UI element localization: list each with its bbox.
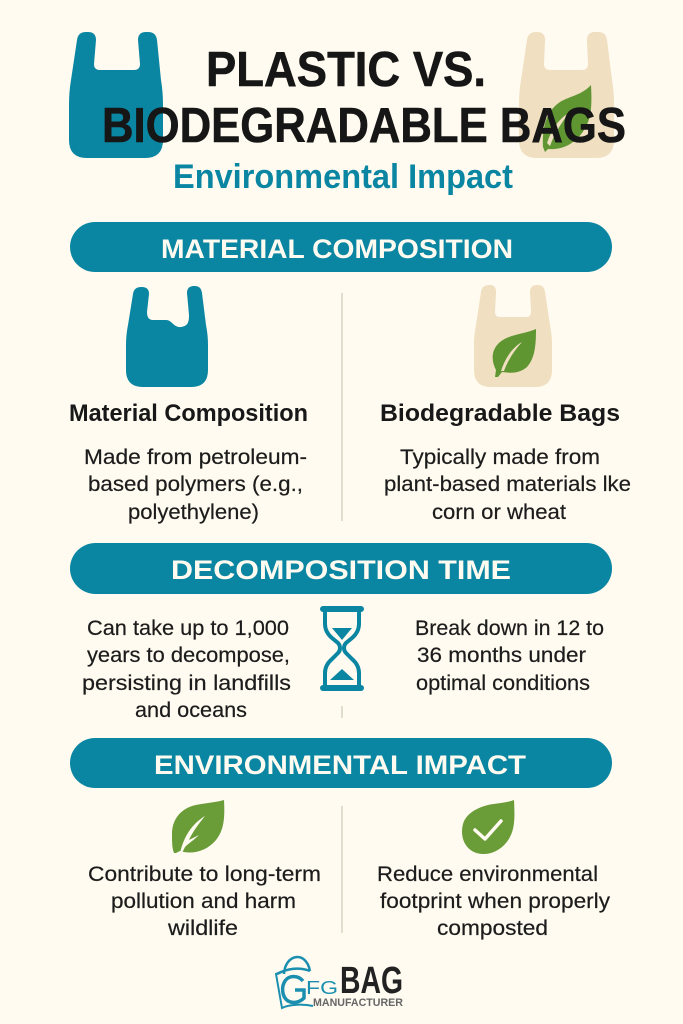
text: biodegradable material: corn or wheat <box>432 501 566 524</box>
icon: hourglass <box>320 606 364 691</box>
text: biodegradable impact: composted <box>437 917 548 940</box>
icon: check leaf <box>462 800 514 854</box>
title: BIODEGRADABLE BAGS <box>102 99 626 153</box>
text: biodegradable impact: footprint when properly <box>380 890 611 913</box>
banner: material composition: MATERIAL COMPOSITION <box>161 234 513 264</box>
subtitle: Environmental Impact <box>173 158 513 196</box>
text: plastic decomposition: persisting in landfills <box>82 672 291 695</box>
text: plastic impact: Contribute to long-term <box>88 863 321 886</box>
text: biodegradable material: plant-based materials lke <box>384 473 631 496</box>
icon: biodegradable bag with leaf <box>474 285 552 387</box>
text: biodegradable decomposition: 36 months under <box>417 644 586 667</box>
right heading: biodegradable bags: Biodegradable Bags <box>380 400 620 427</box>
text: plastic decomposition <box>82 617 291 722</box>
logo: MANUFACTURER <box>313 997 403 1009</box>
text: plastic decomposition: years to decompose, <box>87 644 290 667</box>
logo: FG <box>306 978 338 998</box>
icon: leaf <box>172 800 224 853</box>
text: plastic material: based polymers (e.g., <box>88 473 303 496</box>
text: plastic material: Made from petroleum- <box>84 446 307 469</box>
logo <box>276 957 403 1009</box>
text: plastic impact <box>88 863 321 940</box>
text: plastic material <box>84 446 307 524</box>
left heading: material composition: Material Composition <box>69 400 308 427</box>
text: biodegradable decomposition: Break down in 12 to <box>415 617 604 640</box>
logo: BAG <box>340 960 403 1002</box>
banner: material composition <box>70 222 612 272</box>
text: biodegradable material: Typically made from <box>400 446 600 469</box>
text: plastic impact: pollution and harm <box>111 890 296 913</box>
icon: plastic bag <box>126 286 208 387</box>
text: plastic decomposition: and oceans <box>135 699 247 722</box>
icon: header biodegradable bag with leaf <box>519 32 614 158</box>
icon: header plastic bag <box>69 32 163 158</box>
banner: decomposition time <box>70 543 612 594</box>
text: plastic impact: wildlife <box>167 917 238 940</box>
text: biodegradable decomposition: optimal conditions <box>416 672 590 695</box>
text: plastic material: polyethylene) <box>128 501 259 524</box>
text: biodegradable decomposition <box>415 617 604 695</box>
text: biodegradable material <box>384 446 631 524</box>
title <box>102 43 626 153</box>
banner: decomposition time: DECOMPOSITION TIME <box>171 555 511 585</box>
banner: environmental impact: ENVIRONMENTAL IMPACT <box>154 750 527 780</box>
title: PLASTIC VS. <box>206 43 486 97</box>
text: biodegradable impact: Reduce environmental <box>377 863 598 886</box>
text: plastic decomposition: Can take up to 1,000 <box>87 617 289 640</box>
text: biodegradable impact <box>377 863 611 940</box>
banner: environmental impact <box>70 738 612 788</box>
